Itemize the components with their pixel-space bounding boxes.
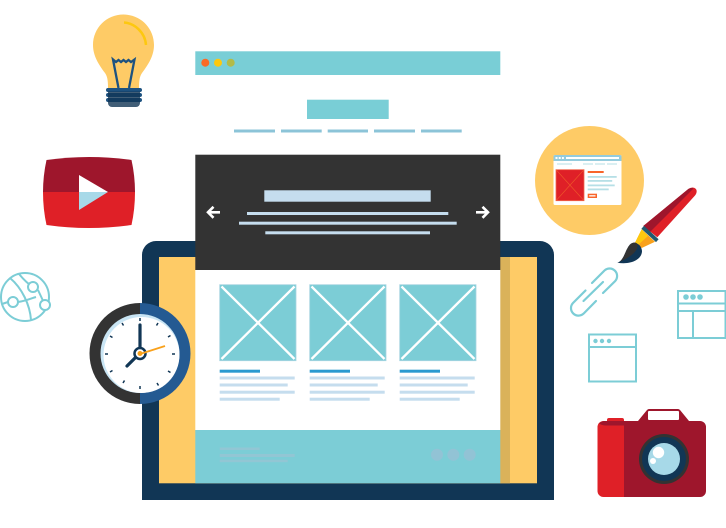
- icon: camera: [598, 409, 706, 497]
- icon: browser window: [589, 334, 636, 382]
- right arrow: [476, 207, 488, 218]
- icon: globe network: [1, 273, 50, 321]
- hero slider panel: [195, 155, 500, 270]
- left arrow: [208, 207, 220, 218]
- icon: video play button: [43, 157, 135, 228]
- content column 2: [310, 285, 386, 401]
- page content area: [195, 270, 500, 430]
- clock ticks: [105, 318, 175, 389]
- icon: light bulb: [93, 14, 154, 107]
- page logo block: [307, 100, 389, 119]
- icon: layout window: [678, 291, 726, 338]
- icon: website mockup badge: [535, 126, 644, 235]
- icon: clock: [89, 303, 190, 404]
- browser top bar: [195, 51, 500, 75]
- page footer: [195, 430, 500, 483]
- content column 1: [220, 285, 296, 401]
- navigation links: [234, 130, 462, 132]
- icon: paint brush: [617, 188, 697, 263]
- laptop frame: [142, 241, 554, 500]
- content column 3: [400, 285, 476, 401]
- icon: chain link: [571, 268, 617, 316]
